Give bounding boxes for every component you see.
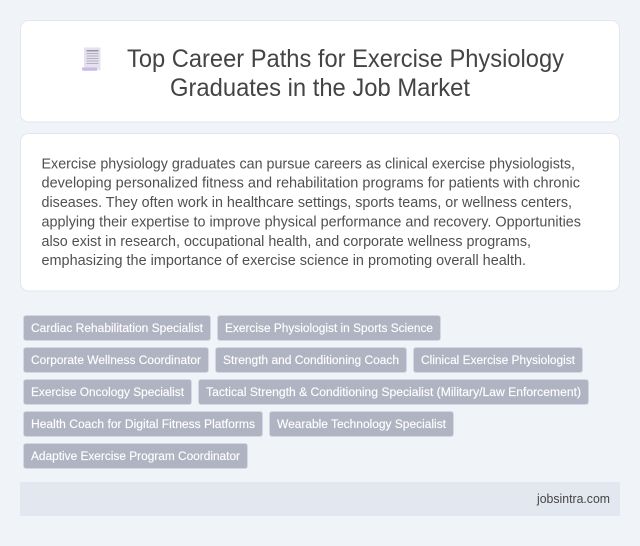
tag: Adaptive Exercise Program Coordinator: Adaptive Exercise Program Coordinator [31, 449, 240, 463]
tag: Tactical Strength & Conditioning Specialist [198, 380, 588, 404]
tag: Clinical Exercise Physiologist: Clinical Exercise Physiologist [421, 353, 576, 367]
icon: document scroll [82, 48, 100, 71]
text block: description [42, 156, 581, 269]
footer [20, 482, 620, 516]
text block: description: diseases. They often work in healthcare settings, sports teams, or wellness centers, [42, 195, 572, 211]
text block: description: also exist in research, occupational health, and corporate wellness programs, [42, 234, 531, 250]
text block: description: developing personalized fitness and rehabilitation programs for patients with chronic [42, 176, 580, 192]
tag: Strength and Conditioning Coach: Strength and Conditioning Coach [223, 353, 399, 367]
tag: Health Coach for Digital Fitness Platforms: Health Coach for Digital Fitness Platforms [31, 417, 255, 431]
tag: Clinical Exercise Physiologist [414, 348, 582, 372]
text block: description: applying their expertise to improve physical performance and recovery. Opportunities [42, 215, 581, 231]
text block: description: emphasizing the importance of exercise science in promoting overall health. [42, 253, 526, 269]
tag: Exercise Oncology Specialist: Exercise Oncology Specialist [31, 385, 185, 399]
tag: Tactical Strength & Conditioning Specialist: Tactical Strength & Conditioning Specialist (Military/Law Enforcement) [206, 385, 581, 399]
text block: description: Exercise physiology graduates can pursue careers as clinical exercise physiologists, [42, 156, 575, 172]
footer: jobsintra.com [536, 492, 610, 506]
panel: header [20, 20, 620, 122]
tag: Health Coach for Digital Fitness Platforms [24, 412, 262, 436]
tag list: career paths [24, 316, 588, 468]
panel: description [20, 134, 620, 291]
tag: Corporate Wellness Coordinator: Corporate Wellness Coordinator [31, 353, 201, 367]
tag: Cardiac Rehabilitation Specialist: Cardiac Rehabilitation Specialist [31, 321, 204, 335]
tag: Wearable Technology Specialist: Wearable Technology Specialist [277, 417, 447, 431]
tag: Wearable Technology Specialist [270, 412, 454, 436]
tag: Strength and Conditioning Coach [216, 348, 406, 372]
tag: Corporate Wellness Coordinator [24, 348, 208, 372]
tag: Exercise Physiologist in Sports Science: Exercise Physiologist in Sports Science [225, 321, 433, 335]
tag: Adaptive Exercise Program Coordinator [24, 444, 248, 468]
title: Graduates in the Job Market [170, 74, 470, 102]
title [127, 45, 564, 102]
tag: Exercise Physiologist in Sports Science [218, 316, 440, 340]
title: Top Career Paths for Exercise Physiology [127, 45, 564, 73]
tag: Exercise Oncology Specialist [24, 380, 192, 404]
tag: Cardiac Rehabilitation Specialist [24, 316, 210, 340]
